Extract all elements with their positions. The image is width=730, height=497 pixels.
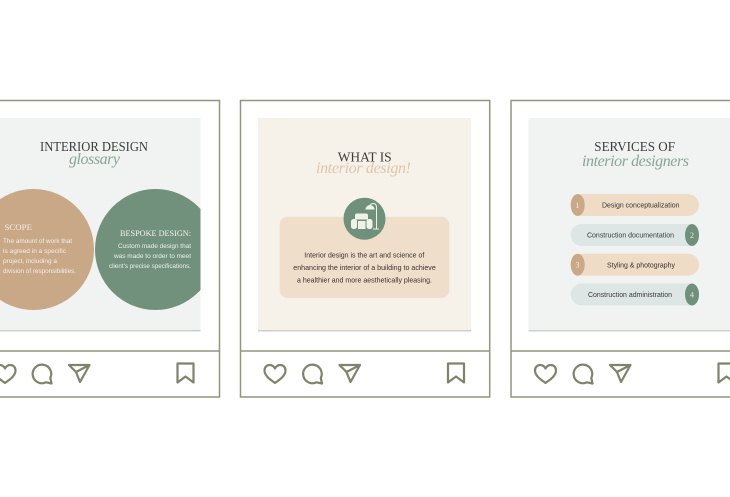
icon: comment	[33, 365, 52, 384]
circle: scope: SCOPE	[4, 222, 32, 232]
service 1	[571, 194, 699, 216]
service 2: 2	[690, 231, 694, 240]
circle: bespoke design	[95, 189, 200, 310]
icon: comment	[574, 365, 592, 384]
post card 3: services	[511, 100, 730, 397]
action icons 3	[535, 364, 730, 384]
text box: Interior design is the art and science of	[304, 250, 424, 259]
frame 3	[511, 100, 730, 397]
frame 2	[240, 100, 490, 397]
circle: bespoke design: Custom made design that	[118, 243, 191, 250]
icon: send	[69, 365, 90, 382]
circle: bespoke design: client's precise specifications.	[109, 263, 191, 270]
icon: send	[340, 365, 360, 382]
script: interior design: interior design!	[316, 160, 411, 177]
title: interior design: INTERIOR DESIGN	[40, 139, 148, 154]
service 2	[571, 224, 699, 246]
icon: comment	[303, 365, 322, 384]
text box: enhancing the interior of a building to achieve	[293, 263, 436, 272]
circle: bespoke design: BESPOKE DESIGN:	[120, 228, 191, 238]
circle: bespoke design: was made to order to meet	[113, 253, 191, 260]
circle: scope: division of responsibilities.	[3, 268, 76, 275]
icon: bookmark	[178, 364, 194, 382]
post card 2: what is interior design	[240, 100, 490, 397]
circle: scope: project, including a	[3, 258, 57, 265]
service 3: Styling & photography	[607, 260, 675, 270]
service 4	[571, 284, 699, 306]
service 3	[571, 254, 699, 276]
script: interior designers: interior designers	[582, 153, 689, 170]
title: services of: SERVICES OF	[594, 139, 675, 154]
title: what is: WHAT IS	[338, 150, 392, 164]
text box: a healthier and more aesthetically pleasing.	[297, 276, 432, 284]
icon: send	[610, 365, 630, 382]
icon: heart	[535, 365, 556, 383]
service 1: Design conceptualization	[602, 201, 680, 210]
icon: sofa and lamp	[344, 198, 386, 240]
icon: heart	[0, 365, 16, 383]
circle: scope	[0, 189, 94, 310]
icon: bookmark	[448, 364, 464, 382]
panel: services	[528, 118, 730, 332]
icon: heart	[264, 365, 286, 383]
service 4: Construction administration	[588, 290, 672, 299]
frame 1	[0, 100, 220, 397]
action icons 2	[264, 364, 464, 384]
service 2: Construction documentation	[587, 231, 674, 240]
icon: bookmark	[718, 364, 730, 382]
panel: glossary	[0, 118, 216, 332]
service 1: 1	[576, 201, 580, 210]
text box	[280, 217, 449, 298]
service 4: 4	[690, 290, 694, 300]
panel: what is	[258, 118, 471, 332]
script: glossary: glossary	[69, 151, 121, 168]
circle: scope: is agreed in a specific	[3, 248, 67, 255]
circle: scope: The amount of work that	[3, 238, 72, 245]
post card 1: glossary	[0, 100, 220, 397]
service 3: 3	[576, 261, 580, 270]
action icons 1	[0, 364, 194, 384]
